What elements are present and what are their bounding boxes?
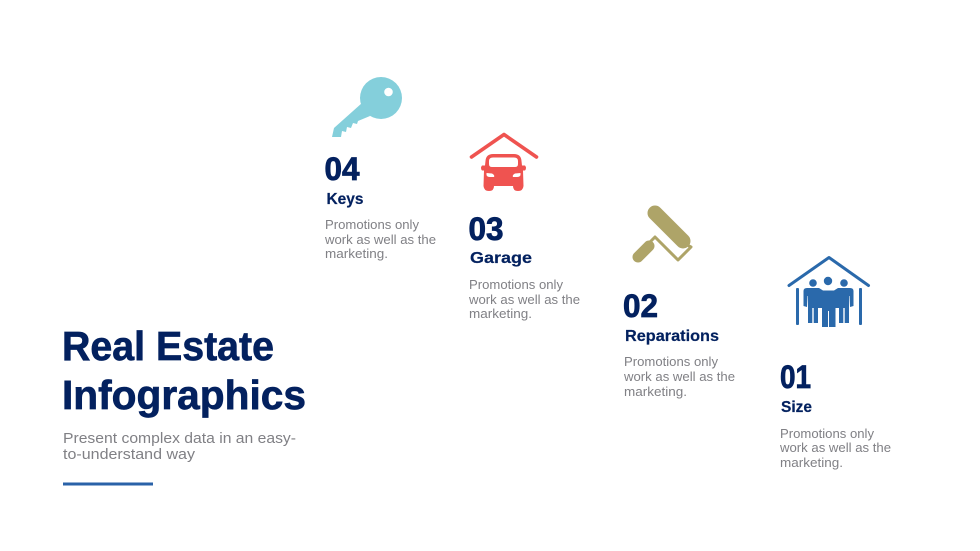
subtitle: to-understand way [63, 446, 195, 463]
panel: 02 reparations [623, 213, 735, 399]
panel: 04 keys [324, 77, 436, 261]
icon: people in house [789, 258, 868, 327]
panel: 01 size [779, 258, 891, 470]
body text [324, 218, 436, 261]
body text [468, 278, 580, 321]
body text: work as well as the [324, 233, 436, 247]
title underline [63, 482, 153, 486]
number 02: 02 [623, 288, 658, 324]
subtitle: Present complex data in an easy- [63, 430, 296, 447]
number 01: 01 [780, 359, 811, 395]
icon: key [332, 77, 402, 137]
body text: Promotions only [469, 278, 564, 292]
title [62, 323, 306, 418]
body text [779, 427, 891, 470]
body text: work as well as the [779, 441, 891, 455]
icon: garage [472, 134, 536, 191]
body text: marketing. [624, 385, 687, 399]
body text: Promotions only [780, 427, 875, 441]
body text: marketing. [780, 456, 843, 470]
body text: marketing. [469, 307, 532, 321]
body text: Promotions only [624, 355, 719, 369]
body text: Promotions only [325, 218, 420, 232]
heading: size: Size [781, 399, 812, 416]
icon: paint roller [638, 213, 691, 260]
body text [623, 355, 735, 399]
panel: 03 garage [468, 134, 580, 321]
subtitle [63, 430, 296, 463]
body text: work as well as the [468, 293, 580, 307]
body text: work as well as the [623, 370, 735, 384]
number 03: 03 [468, 211, 504, 247]
number 04: 04 [324, 151, 360, 187]
heading: garage: Garage [470, 250, 532, 267]
body text: marketing. [325, 247, 388, 261]
heading: reparations: Reparations [625, 328, 719, 345]
title: Real Estate [62, 323, 274, 369]
title: Infographics [62, 372, 306, 418]
heading: keys: Keys [326, 191, 364, 208]
